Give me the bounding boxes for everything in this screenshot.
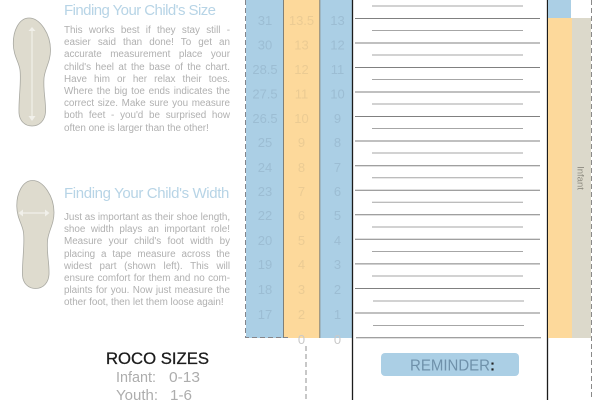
column: first blue size numbers: 22 bbox=[258, 208, 272, 223]
column: second blue size numbers: 1 bbox=[334, 307, 341, 322]
body text: width bbox=[64, 212, 230, 308]
column: yellow size numbers: 10 bbox=[294, 111, 309, 126]
column: second blue size numbers: 4 bbox=[334, 233, 341, 248]
column: yellow size numbers: 13 bbox=[294, 38, 309, 52]
heading: finding your child's width: Finding Your Child's Width bbox=[64, 185, 229, 202]
body text: width: other foot, then let them loose again! bbox=[64, 297, 224, 308]
body text: size: Have him or her relax their toes. bbox=[64, 74, 230, 85]
body text: size: child's heel at the base of the chart. bbox=[64, 62, 230, 73]
column: second blue size numbers: 6 bbox=[334, 184, 341, 199]
text block: finding width bbox=[64, 185, 230, 308]
column: first blue size numbers: 20 bbox=[258, 233, 272, 248]
body text: width: ensure comfort for them and no com- bbox=[64, 273, 230, 284]
body text: size: Where the big toe ends indicates the bbox=[64, 86, 230, 97]
column: first blue size numbers: 24 bbox=[258, 160, 272, 175]
panel: right size strips bbox=[548, 0, 592, 400]
column: second blue size numbers: 7 bbox=[334, 160, 341, 175]
column: yellow size numbers: 6 bbox=[298, 208, 305, 223]
column: yellow size numbers: 13.5 bbox=[289, 13, 314, 28]
column: second blue size numbers: 11 bbox=[331, 62, 344, 77]
size list: 0-13 bbox=[169, 369, 200, 386]
column: yellow size numbers bbox=[289, 13, 314, 347]
text block: finding size bbox=[64, 2, 230, 134]
body text: width: Just as important as their shoe length, bbox=[64, 212, 230, 223]
label: infant: Infant bbox=[574, 166, 586, 190]
heading: roco sizes: ROCO SIZES bbox=[106, 349, 209, 368]
body text: width: widest part (shown left). This will bbox=[64, 261, 230, 272]
body text: width: Measure your child's foot width by bbox=[64, 236, 230, 247]
body text: size: easier said than done! To get an bbox=[64, 37, 230, 48]
body text: size: correct size. Make sure you measure bbox=[64, 98, 230, 109]
column: yellow size numbers: 11 bbox=[295, 86, 308, 102]
body text: size: accurate measurement place your bbox=[64, 49, 230, 60]
column: first blue size numbers: 23 bbox=[258, 184, 272, 199]
column: first blue size numbers: 31 bbox=[258, 13, 272, 28]
column: second blue size numbers: 2 bbox=[334, 282, 341, 297]
column: first blue size numbers: 18 bbox=[258, 282, 272, 297]
column: yellow size numbers: 2 bbox=[298, 307, 305, 322]
column: first blue size numbers: 30 bbox=[258, 38, 272, 52]
column: second blue size numbers: 3 bbox=[334, 257, 341, 272]
body text: width: placing a tape measure across the bbox=[64, 249, 230, 260]
column: first blue size numbers: 28.5 bbox=[252, 62, 278, 77]
column: first blue size numbers: 27.5 bbox=[252, 86, 278, 102]
column: yellow size numbers: 8 bbox=[298, 160, 305, 175]
body text: size: This works best if they stay still - bbox=[64, 25, 230, 36]
callout: reminder bbox=[381, 353, 519, 376]
column: yellow size numbers: 7 bbox=[298, 184, 305, 199]
callout: reminder: REMINDER: bbox=[410, 358, 495, 374]
column: yellow size numbers: 0 bbox=[298, 332, 305, 347]
column: yellow size numbers: 5 bbox=[298, 233, 305, 248]
column: first blue size numbers: 26.5 bbox=[252, 111, 278, 126]
icon: foot with length arrow bbox=[13, 18, 50, 126]
column: yellow size numbers: 12 bbox=[294, 62, 309, 77]
icon: foot with width arrow bbox=[17, 180, 54, 288]
column: yellow size numbers: 3 bbox=[298, 282, 305, 297]
column: second blue size numbers: 13 bbox=[330, 13, 345, 28]
column: second blue size numbers: 5 bbox=[334, 208, 341, 223]
panel: size columns bbox=[246, 0, 352, 400]
column: second blue size numbers: 9 bbox=[334, 111, 341, 126]
column: first blue size numbers bbox=[252, 13, 278, 322]
body text: size: often one is larger than the other! bbox=[64, 123, 209, 134]
body text: width: plaints for you. Now just measure the bbox=[64, 285, 230, 296]
column: first blue size numbers: 17 bbox=[258, 307, 272, 322]
column: first blue size numbers: 19 bbox=[258, 257, 272, 272]
size list bbox=[116, 369, 200, 400]
size list: Infant: bbox=[116, 369, 156, 386]
column: second blue size numbers: 10 bbox=[330, 86, 345, 102]
body text: size bbox=[64, 25, 230, 134]
column: first blue size numbers: 25 bbox=[258, 135, 272, 150]
column: second blue size numbers bbox=[330, 13, 345, 347]
column: second blue size numbers: 0 bbox=[334, 332, 341, 347]
body text: width: shoe width plays an important role! bbox=[64, 224, 230, 235]
column: second blue size numbers: 8 bbox=[334, 135, 341, 150]
heading: finding your child's size: Finding Your Child's Size bbox=[64, 2, 215, 19]
body text: size: both feet - you'd be surprised how bbox=[64, 110, 230, 121]
panel: measuring lines bbox=[352, 0, 548, 400]
column: second blue size numbers: 12 bbox=[330, 38, 345, 52]
column: yellow size numbers: 9 bbox=[298, 135, 305, 150]
column: yellow size numbers: 4 bbox=[298, 257, 305, 272]
